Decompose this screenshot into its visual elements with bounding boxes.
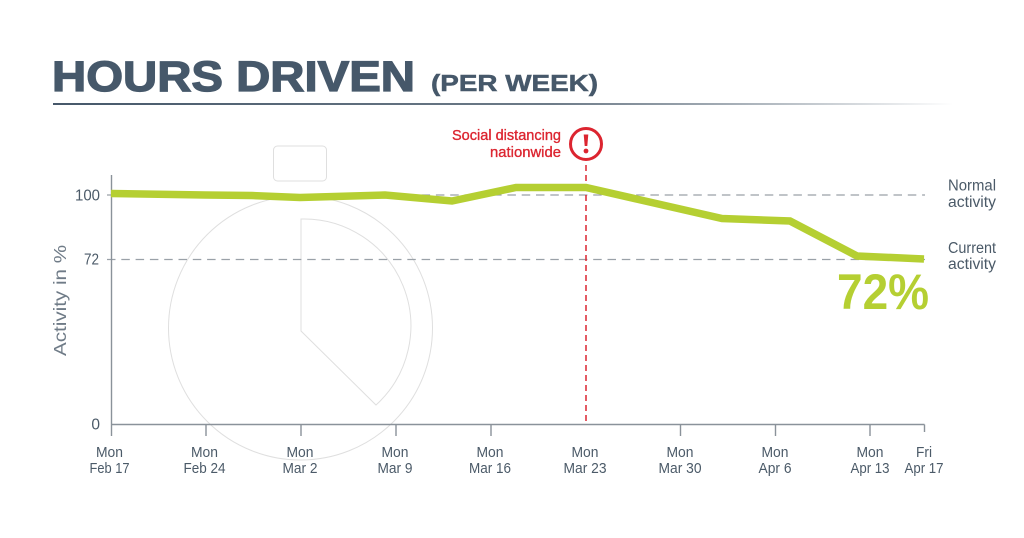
x axis labels: Mar 16: [469, 460, 511, 477]
x axis labels: Mar 2: [282, 460, 318, 477]
label: normal activity: activity: [948, 194, 996, 211]
x axis labels: Apr 17: [904, 460, 944, 477]
x axis labels: [90, 444, 944, 477]
x axis labels: Mon: [572, 444, 598, 461]
label: current activity: Current: [948, 240, 997, 257]
title: HOURS DRIVEN: [52, 53, 415, 101]
x axis labels: Mon: [382, 444, 408, 461]
x axis labels: Fri: [916, 444, 932, 461]
x axis labels: Apr 13: [850, 460, 890, 477]
label: current activity: activity: [948, 256, 996, 273]
reference line: current activity: [107, 258, 925, 260]
social distancing marker line: [585, 165, 587, 424]
activity line: [111, 188, 924, 259]
x axis labels: Mon: [666, 444, 694, 461]
x axis labels: Mar 23: [564, 460, 606, 477]
y axis labels: [75, 188, 100, 434]
value: 72%: 72%: [837, 264, 929, 320]
watermark: stopwatch: [168, 146, 432, 460]
y axis labels: 0: [91, 416, 100, 434]
icon: alert: [570, 128, 602, 160]
x axis labels: Mon: [762, 444, 788, 461]
callout: social distancing: Social distancing: [452, 127, 561, 144]
x axis labels: Mon: [96, 444, 123, 461]
title: [52, 53, 598, 101]
callout: social distancing: [452, 127, 602, 161]
label: current activity: [948, 240, 997, 273]
x axis labels: Feb 24: [184, 460, 226, 477]
x axis labels: Mar 30: [658, 460, 702, 477]
x axis labels: Mon: [191, 444, 218, 461]
x axis labels: Feb 17: [90, 460, 130, 477]
label: normal activity: [948, 178, 996, 211]
axes: [112, 175, 924, 436]
title: (PER WEEK): [431, 70, 598, 96]
label: normal activity: Normal: [948, 178, 996, 194]
y axis labels: 72: [84, 252, 99, 268]
x axis labels: Apr 6: [758, 460, 792, 477]
x axis labels: Mon: [856, 444, 884, 461]
reference line: normal activity: [107, 194, 925, 196]
x axis labels: Mon: [476, 444, 504, 461]
y axis labels: 100: [75, 188, 100, 204]
title rule: [53, 103, 953, 105]
y axis title: Activity in %: [50, 245, 70, 356]
callout: social distancing: nationwide: [490, 144, 561, 161]
x axis labels: Mon: [286, 444, 314, 461]
x axis labels: Mar 9: [378, 460, 412, 477]
